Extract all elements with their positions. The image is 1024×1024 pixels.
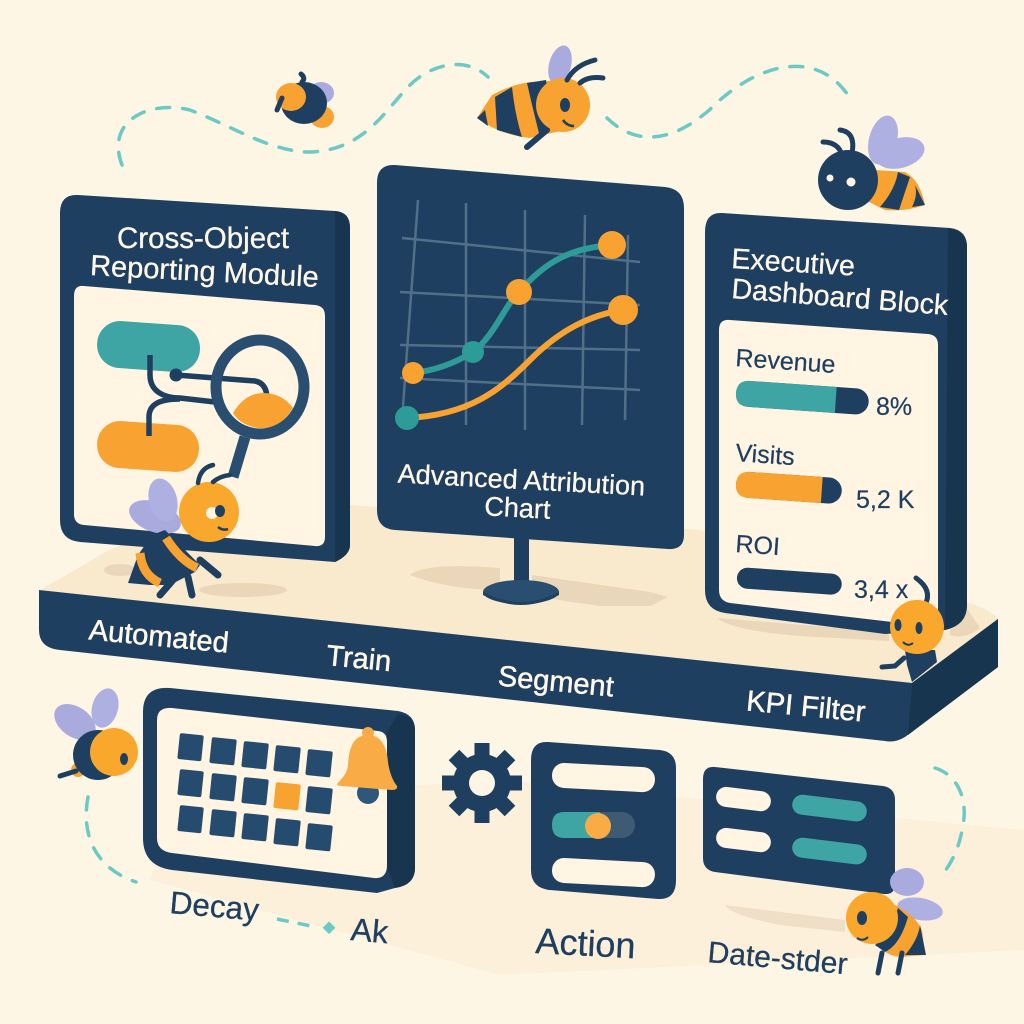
line chart — [395, 200, 640, 430]
metric: Revenue: Revenue — [735, 344, 836, 379]
heading — [730, 243, 950, 322]
panel: action sliders — [531, 742, 676, 899]
inner card — [74, 286, 325, 546]
label: Date-stder: Date-stder — [706, 936, 849, 981]
metric: ROI: ROI — [735, 530, 781, 561]
icon: bee top left — [276, 74, 334, 128]
connector Decay to Ak — [277, 919, 335, 934]
icon: small bee on platform corner — [882, 578, 944, 682]
inner card — [719, 320, 938, 626]
heading: Executive — [731, 243, 856, 283]
platform shadows — [104, 564, 980, 641]
icon: bee top centre — [477, 43, 603, 147]
platform labels: Automated — [88, 614, 230, 660]
platform labels: Train — [325, 640, 393, 678]
metric: Visits — [735, 439, 915, 514]
connectors — [149, 355, 267, 436]
calendar screen — [157, 708, 387, 878]
floor shadow — [150, 780, 1024, 975]
heading: Dashboard Block — [730, 273, 950, 322]
panel: Advanced Attribution Chart — [377, 165, 684, 605]
metric: ROI: 3,4 x — [854, 576, 909, 604]
label: Ak: Ak — [349, 911, 391, 950]
platform labels: KPI Filter — [745, 685, 867, 729]
floor streak — [725, 905, 845, 932]
flow pills — [96, 320, 202, 374]
metric: ROI — [735, 530, 909, 604]
label: Decay: Decay — [168, 884, 261, 928]
heading — [397, 459, 646, 525]
magnifier — [216, 340, 304, 477]
icon: bee top right — [818, 112, 928, 210]
metric: Visits: Visits — [735, 439, 796, 471]
icon: bee lower right — [846, 868, 945, 973]
heading: Advanced Attribution — [397, 459, 646, 501]
calendar cells — [177, 733, 333, 851]
metric: Visits: 5,2 K — [856, 486, 915, 514]
platform labels — [88, 614, 867, 729]
panel: date slider list — [703, 767, 895, 894]
panel: Cross-Object Reporting Module: Reporting Module — [89, 250, 320, 294]
panel: calendar — [143, 688, 415, 893]
panel: Executive Dashboard Block — [705, 213, 967, 634]
icon: bell — [337, 727, 397, 804]
dashed flight paths — [86, 65, 964, 882]
icon: worker bee on left panel — [124, 465, 239, 595]
icon: gear — [442, 743, 522, 823]
heading: Cross-Object — [117, 222, 289, 255]
panel: Cross-Object Reporting Module — [60, 195, 350, 562]
icon: bee lower left — [48, 685, 138, 780]
heading: Chart — [484, 491, 552, 525]
platform labels: Segment — [497, 661, 615, 704]
monitor stand — [483, 535, 559, 605]
metric: Revenue — [735, 344, 912, 421]
platform — [39, 505, 998, 742]
metric: Revenue: 8% — [876, 393, 912, 421]
label: Action: Action — [535, 920, 637, 966]
